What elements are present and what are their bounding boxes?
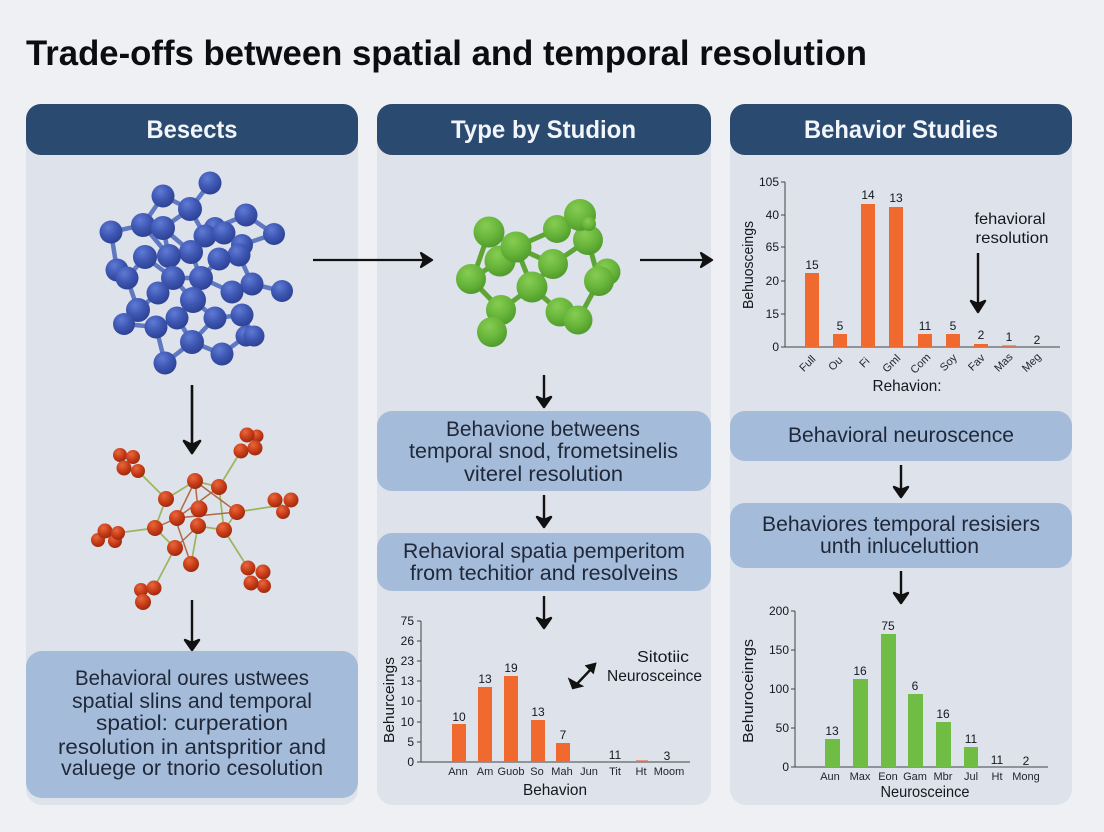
text box: left: valuege or tnorio cesolution [61,756,323,780]
bar chart: behavior: Jun [580,766,598,778]
bar chart: neuroscience: 2 [1023,754,1030,768]
middle header [377,104,711,155]
arrow: middle to right column [640,253,712,267]
bar chart: neuroscience: 0 [782,760,789,774]
bar chart: behavior: Ht [636,766,646,778]
text box: right lower: unth inluceluttion [820,534,979,558]
bar chart: neuroscience: 100 [769,682,789,696]
bar chart: behavioral resolution: 5 [837,319,844,333]
bar chart: behavioral resolution: Fav [966,352,988,374]
bar chart: behavior: 7 [560,728,567,742]
arrow: molecule to box [537,375,551,407]
bar chart: behavioral resolution: 1 [1006,330,1013,344]
double arrow annotation [570,664,595,688]
bar chart: behavioral resolution: Behuosceings [741,221,757,309]
bar chart: neuroscience: Mbr [934,771,953,783]
bar chart: behavior: 5 [407,735,414,749]
bar chart: neuroscience [741,604,1048,801]
arrow: box to chart [894,571,908,603]
arrow: red molecule to text box [185,600,199,650]
bar chart: neuroscience: 16 [853,664,867,678]
arrow: upper to lower box [894,465,908,497]
text box: middle lower: Rehavioral spatia pemperitom [403,539,685,563]
bar chart: behavior: 10 [452,710,466,724]
text box: right lower [730,503,1072,568]
right header [730,104,1072,155]
bar chart: behavior [382,614,702,799]
bar chart: behavioral resolution [741,175,1060,395]
bar chart: behavior: 26 [401,634,414,648]
bar chart: neuroscience: 200 [769,604,789,618]
arrow: left to middle column [313,253,432,267]
bar chart: behavior: Am [477,766,493,778]
left header [26,104,358,155]
bar chart: neuroscience: Ht [992,771,1002,783]
bar chart: neuroscience: Eon [878,771,898,783]
text box: left: Behavioral oures ustwees [75,666,309,690]
bar chart: behavior: 3 [664,749,671,763]
chart annotation [974,211,1048,247]
bar chart: behavioral resolution: Rehavion: [872,378,942,395]
bar chart: neuroscience: 11 [991,753,1004,767]
icon: green molecule [456,199,620,347]
text box: middle upper: viterel resolution [464,462,623,486]
bar chart: behavior: 10 [401,715,414,729]
text box: left: spatiol: curperation [96,711,288,735]
chart annotation: Sitotiic [637,649,689,666]
bar chart: behavioral resolution: 20 [766,274,779,288]
panel: left column [26,104,358,805]
bar chart: neuroscience: 13 [825,724,839,738]
bar chart: neuroscience: Behuroceinrgs [741,639,757,743]
bar chart: behavior: 19 [504,661,518,675]
middle header: Type by Studion [451,116,636,144]
text box: middle upper: temporal snod, frometsinelis [409,439,678,463]
bar chart: behavioral resolution: 0 [772,340,779,354]
bar chart: behavioral resolution: 14 [861,188,875,202]
bar chart: behavioral resolution: 13 [889,191,903,205]
bar chart: behavioral resolution: 2 [1034,333,1041,347]
bar chart: neuroscience: 11 [965,732,978,746]
bar chart: behavioral resolution: 2 [978,328,985,342]
bar chart: behavior: Behurceings [382,657,398,743]
right header: Behavior Studies [804,116,998,144]
arrow: annotation to bars [971,253,985,312]
chart annotation: fehavioral [974,211,1046,228]
bar chart: neuroscience: Gam [903,771,927,783]
bar chart: behavioral resolution: Full [797,353,818,374]
text box: left [26,651,358,798]
bar chart: behavior: 13 [478,672,492,686]
arrow: blue molecule to red molecule [184,385,200,453]
chart annotation [607,649,702,685]
text box: middle lower [377,533,711,591]
bar chart: behavioral resolution: 5 [950,319,957,333]
title: Trade-offs between spatial and temporal resolution [26,34,867,73]
bar chart: behavior: 13 [531,705,545,719]
bar chart: neuroscience: Neurosceince [880,784,970,801]
bar chart: behavioral resolution: Com [908,351,933,376]
chart annotation: Neurosceince [607,668,702,685]
bar chart: behavior: Tit [609,766,621,778]
text box: middle upper: Behavione betweens [446,417,640,441]
arrow: upper to lower box [537,495,551,527]
bar chart: neuroscience: Mong [1012,771,1040,783]
icon: red molecule [91,428,298,610]
bar chart: behavior: 75 [401,614,414,628]
bar chart: behavior: 0 [407,755,414,769]
bar chart: neuroscience: 75 [881,619,895,633]
bar chart: behavioral resolution: 15 [766,307,779,321]
arrow: box to chart [537,596,551,628]
bar chart: behavior: 10 [401,694,414,708]
text box: middle lower: from techitior and resolveins [410,561,678,585]
bar chart: neuroscience: 150 [769,643,789,657]
bar chart: behavior: 23 [401,654,414,668]
text box: left: spatial slins and temporal [72,689,312,713]
bar chart: behavior: Mah [551,766,573,778]
bar chart: behavior: Ann [448,766,468,778]
chart annotation: resolution [976,230,1048,247]
text box: middle upper [377,411,711,491]
bar chart: behavioral resolution: Mas [992,351,1016,374]
bar chart: neuroscience: 50 [776,721,789,735]
bar chart: behavioral resolution: 15 [805,258,819,272]
panel: right column [730,104,1072,805]
text box: left: resolution in antspritior and [58,735,326,759]
icon: blue molecule [100,172,293,374]
bar chart: behavioral resolution: Fi [857,355,872,370]
bar chart: behavior: So [530,766,544,778]
bar chart: neuroscience: 16 [936,707,950,721]
bar chart: neuroscience: Max [850,771,871,783]
bar chart: behavior: Moom [654,766,684,778]
bar chart: behavioral resolution: 105 [759,175,779,189]
panel: middle column [377,104,711,805]
bar chart: behavioral resolution: 65 [766,240,779,254]
bar chart: behavioral resolution: Gml [881,353,903,375]
left header: Besects [146,116,238,144]
bar chart: behavioral resolution: Ou [826,354,845,373]
bar chart: neuroscience: Aun [820,771,840,783]
bar chart: behavioral resolution: 40 [766,208,779,222]
bar chart: behavioral resolution: Meg [1020,351,1044,375]
text box: right lower: Behaviores temporal resisiers [762,512,1040,536]
text box: right upper [730,411,1072,461]
bar chart: behavior: Behavion [523,782,587,799]
bar chart: behavioral resolution: Soy [938,352,960,374]
bar chart: neuroscience: 6 [912,679,919,693]
bar chart: behavioral resolution: 11 [919,319,932,333]
text box: right upper: Behavioral neuroscence [788,423,1014,447]
bar chart: behavior: Guob [498,766,524,778]
bar chart: behavior: 11 [609,748,622,762]
bar chart: behavior: 13 [401,674,414,688]
bar chart: neuroscience: Jul [964,771,978,783]
